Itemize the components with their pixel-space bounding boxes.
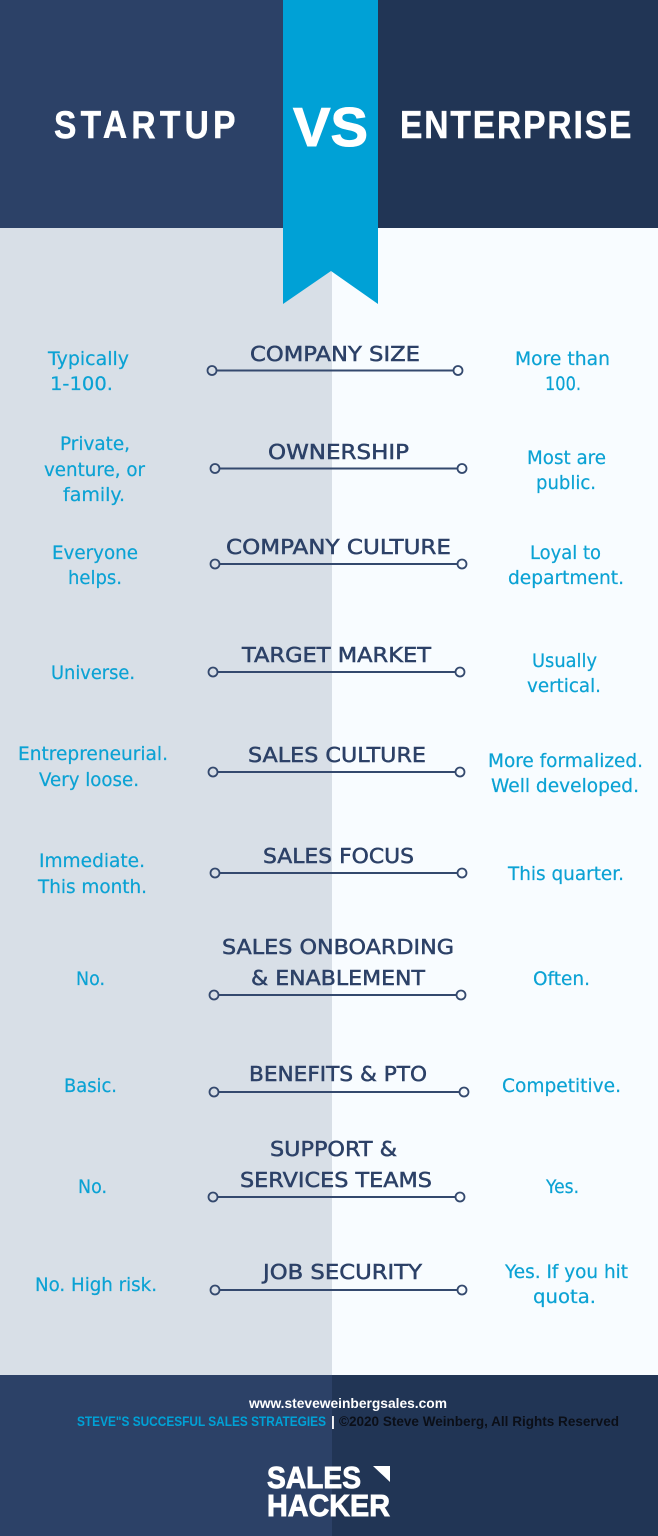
title: enterprise: ENTERPRISE [400,103,631,147]
row: sales culture: Entrepreneurial. [18,744,168,765]
row: support and services teams: SERVICES TEAMS [240,1168,432,1192]
row: support and services teams [78,1137,579,1202]
row: ownership [44,434,606,506]
title: vs: VS [293,96,368,158]
row: sales onboarding and enablement: No. [76,969,105,990]
row: job security: No. High risk. [35,1275,157,1296]
row: job security: Yes. If you hit [504,1262,628,1283]
row: company culture: Loyal to [530,543,601,564]
logo: sales hacker: SALES [267,1460,361,1495]
header [0,0,658,304]
row: company culture: Everyone [52,543,138,564]
row: ownership: Most are [527,448,606,469]
title: startup: STARTUP [54,103,235,147]
row: ownership: Private, [60,434,130,455]
row: sales onboarding and enablement: Often. [533,969,590,990]
row: support and services teams: SUPPORT & [270,1137,397,1161]
row: benefits and pto: BENEFITS & PTO [249,1062,427,1086]
ribbon [283,0,378,304]
row: sales onboarding and enablement: & ENABLEMENT [251,966,426,990]
row: sales culture: SALES CULTURE [248,743,426,767]
row: benefits and pto: Basic. [64,1076,117,1097]
row: sales focus: This quarter. [507,864,624,885]
row: sales focus [37,844,624,898]
row: company size: 100. [545,374,581,395]
row: sales culture: More formalized. [488,751,643,772]
footer website: www.steveweinbergsales.com [248,1395,447,1411]
logo: sales hacker [267,1460,390,1523]
row: sales onboarding and enablement [76,935,590,1000]
row: benefits and pto: Competitive. [502,1076,621,1097]
row: target market: Universe. [51,663,135,684]
row: company size: 1-100. [50,374,113,395]
row: sales focus: This month. [37,877,147,898]
logo: sales hacker: HACKER [267,1488,390,1523]
row: company size: More than [515,349,610,370]
row: job security: JOB SECURITY [261,1260,423,1284]
row: ownership: family. [63,485,125,506]
row: target market: TARGET MARKET [241,643,432,667]
row: support and services teams: Yes. [545,1177,579,1198]
row: target market: vertical. [527,676,601,697]
footer [0,1375,658,1536]
row: support and services teams: No. [78,1177,107,1198]
row: sales onboarding and enablement: SALES ONBOARDING [222,935,454,959]
row: benefits and pto [64,1062,621,1097]
row: sales focus: Immediate. [39,851,145,872]
row: job security [35,1260,628,1308]
row: company culture: department. [508,568,624,589]
background: enterprise column [332,228,658,1375]
row: company size: COMPANY SIZE [250,342,420,366]
footer separator: | [331,1413,335,1429]
row: ownership: public. [536,473,596,494]
row: company size: Typically [47,349,129,370]
row: company culture: helps. [68,568,122,589]
background: startup column [0,228,332,1375]
row: sales culture: Well developed. [491,776,639,797]
row: sales culture: Very loose. [39,770,139,791]
row: job security: quota. [533,1287,596,1308]
row: sales culture [18,743,643,797]
row: company size [47,342,610,395]
row: ownership: venture, or [44,460,145,481]
row: target market [51,643,601,697]
row: sales focus: SALES FOCUS [263,844,414,868]
row: ownership: OWNERSHIP [268,440,409,464]
footer strategy line: STEVE"S SUCCESFUL SALES STRATEGIES [77,1413,326,1429]
row: company culture [52,535,624,589]
footer copyright: ©2020 Steve Weinberg, All Rights Reserved [339,1413,619,1429]
row: target market: Usually [532,651,597,672]
row: company culture: COMPANY CULTURE [226,535,451,559]
